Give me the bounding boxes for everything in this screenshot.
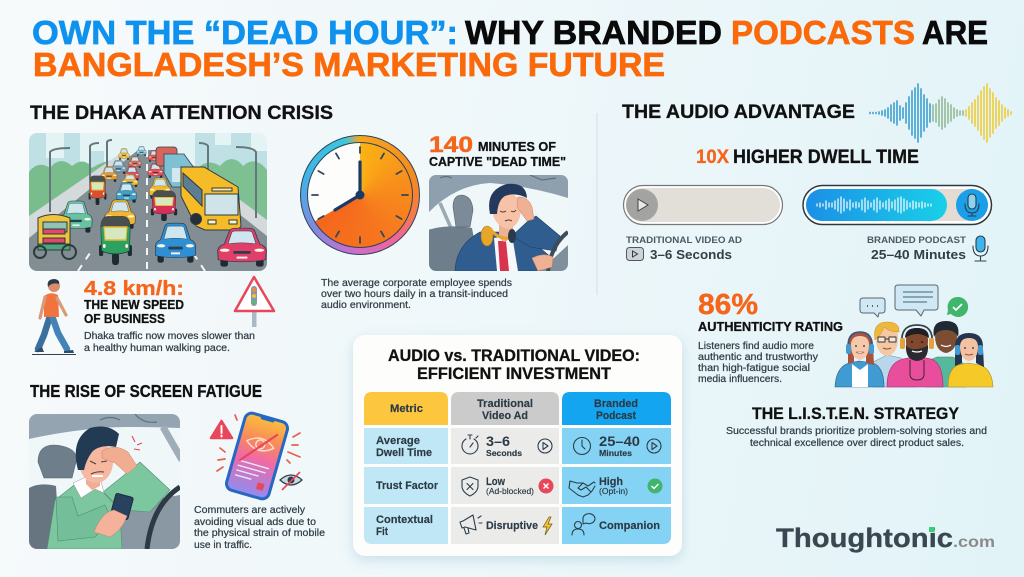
bar: traditional video pill: [624, 186, 782, 224]
header: branded podcast: [562, 392, 671, 425]
text: screen fatigue description: Commuters are actively: [194, 505, 305, 516]
text: dead time headline: CAPTIVE "DEAD TIME": [429, 154, 566, 169]
text: screen fatigue description: avoiding visual ads due to: [194, 517, 316, 528]
stat: 10x higher dwell time: HIGHER DWELL TIME: [733, 147, 919, 168]
label: branded podcast: 25–40 Minutes: [871, 247, 966, 262]
label: branded podcast: [867, 235, 988, 262]
title: WHY BRANDED: [465, 15, 722, 52]
icon: warning triangle: [211, 421, 232, 438]
title: [32, 15, 988, 84]
row: average dwell time: 25–40: [599, 434, 640, 449]
text: authenticity description: media influencers.: [698, 374, 782, 385]
text: authenticity description: authentic and trustworthy: [698, 352, 818, 363]
heading: listen strategy: THE L.I.S.T.E.N. STRATEGY: [752, 404, 960, 423]
header: metric: Metric: [390, 403, 423, 415]
row: trust factor: [364, 467, 671, 504]
title: PODCASTS: [731, 15, 915, 52]
illustration: group of podcast listeners: [835, 285, 993, 387]
check badge: [947, 297, 968, 317]
label: traditional video ad: 3–6 Seconds: [650, 247, 732, 262]
logo: Thoughtonic.com: Thoughtonic: [776, 523, 953, 553]
heading: Dhaka attention crisis: THE DHAKA ATTENTION CRISIS: [30, 103, 333, 124]
text: listen strategy description: technical excellence over direct product sales.: [750, 438, 964, 449]
text: screen fatigue description: the physical strain of mobile: [194, 528, 325, 539]
icon: walking person: [32, 279, 76, 354]
row: contextual fit: Fit: [376, 526, 388, 538]
text: traffic description: Dhaka traffic now moves slower than: [84, 331, 255, 342]
row: trust factor: Trust Factor: [376, 480, 439, 492]
row: average dwell time: 3–6: [486, 434, 511, 449]
red bus: [156, 147, 177, 166]
text: traffic description: a healthy human walking pace.: [84, 343, 230, 354]
table title: [388, 346, 640, 383]
table title: EFFICIENT INVESTMENT: [417, 364, 612, 383]
text: authenticity description: than high-fatigue social: [698, 363, 810, 374]
chart: sound waveform: [870, 84, 1011, 142]
speech bubble large: [895, 285, 938, 316]
divider: [596, 113, 598, 295]
row: average dwell time: Minutes: [599, 448, 632, 458]
row: average dwell time: [364, 428, 671, 464]
text: screen fatigue description: [194, 505, 325, 551]
row: average dwell time: Dwell Time: [376, 447, 432, 459]
rickshaw: [34, 214, 76, 259]
subheading: authenticity rating: AUTHENTICITY RATING: [698, 319, 843, 334]
row: trust factor: (Opt-in): [599, 486, 628, 496]
listener front left: [835, 332, 884, 387]
header: traditional video ad: Video Ad: [482, 410, 528, 422]
row: average dwell time: Seconds: [486, 448, 522, 458]
speech bubble small: [860, 298, 885, 317]
listener back right: [925, 321, 966, 387]
text: authenticity description: Listeners find audio more: [698, 341, 814, 352]
logo: Thoughtonic.com: .com: [953, 534, 995, 551]
text: listen strategy description: Successful brands prioritize problem-solving stories and: [726, 426, 987, 437]
illustration: Dhaka traffic jam: [29, 133, 267, 271]
listener back left: [873, 322, 917, 387]
icon: crossed eye: [280, 472, 302, 490]
text: dead time description: The average corporate employee spends: [321, 278, 512, 289]
label: traditional video ad: TRADITIONAL VIDEO AD: [626, 235, 742, 246]
heading: rise of screen fatigue: THE RISE OF SCREEN FATIGUE: [30, 381, 262, 401]
yellow bus: [181, 167, 241, 230]
stat: 10x higher dwell time: 10X: [696, 147, 729, 168]
illustration: tired commuter with headphones: [428, 175, 568, 271]
header: branded podcast: Podcast: [596, 410, 636, 422]
listener front centre: [887, 325, 943, 387]
label: traditional video ad: [626, 235, 742, 262]
row: contextual fit: [364, 507, 671, 544]
header: traditional video ad: [451, 392, 559, 425]
row: trust factor: High: [599, 476, 623, 488]
icon: strain marks: [217, 415, 300, 471]
header: metric: [364, 392, 448, 425]
teal bus: [164, 154, 194, 187]
text: dead time headline: MINUTES OF: [478, 139, 556, 154]
text: traffic description: [84, 331, 255, 354]
title: OWN THE “DEAD HOUR”:: [32, 15, 458, 52]
header: branded podcast: Branded: [594, 398, 638, 410]
listener front right: [948, 333, 993, 387]
subheading: new speed of business: OF BUSINESS: [84, 311, 165, 326]
label: branded podcast: BRANDED PODCAST: [867, 235, 966, 246]
icon: phone with crossed out eye: [225, 411, 289, 501]
chart: clock showing 140 minutes: [300, 135, 420, 255]
panel: comparison table card: [353, 335, 682, 556]
table title: AUDIO vs. TRADITIONAL VIDEO:: [388, 346, 640, 365]
row: trust factor: Low: [486, 476, 505, 488]
text: dead time description: audio environment.: [321, 300, 411, 311]
text: authenticity description: [698, 341, 818, 385]
text: dead time headline: 140: [429, 132, 473, 157]
text: listen strategy description: [726, 426, 987, 449]
row: contextual fit: Disruptive: [486, 520, 538, 532]
stat: 4.8 km/h: 4.8 km/h:: [84, 277, 184, 300]
subheading: new speed of business: [84, 297, 184, 326]
stat: 86%: 86%: [698, 289, 758, 321]
subheading: new speed of business: THE NEW SPEED: [84, 297, 184, 312]
text: dead time headline: [429, 132, 566, 169]
header: traditional video ad: Traditional: [477, 398, 533, 410]
row: trust factor: (Ad-blocked): [486, 486, 534, 496]
title: BANGLADESH’S MARKETING FUTURE: [33, 47, 665, 84]
illustration: driver with phone and eye strain: [29, 414, 182, 549]
row: contextual fit: Companion: [599, 520, 660, 532]
row: average dwell time: Average: [376, 435, 420, 447]
heading: audio advantage: THE AUDIO ADVANTAGE: [622, 102, 855, 123]
text: dead time description: [321, 278, 512, 311]
bar: branded podcast pill: [803, 186, 992, 224]
icon: traffic warning sign: [235, 277, 274, 327]
title: ARE: [922, 15, 988, 52]
text: dead time description: over two hours daily in a transit-induced: [321, 289, 508, 300]
text: screen fatigue description: use in traffic.: [194, 540, 252, 551]
row: contextual fit: Contextual: [376, 514, 433, 526]
